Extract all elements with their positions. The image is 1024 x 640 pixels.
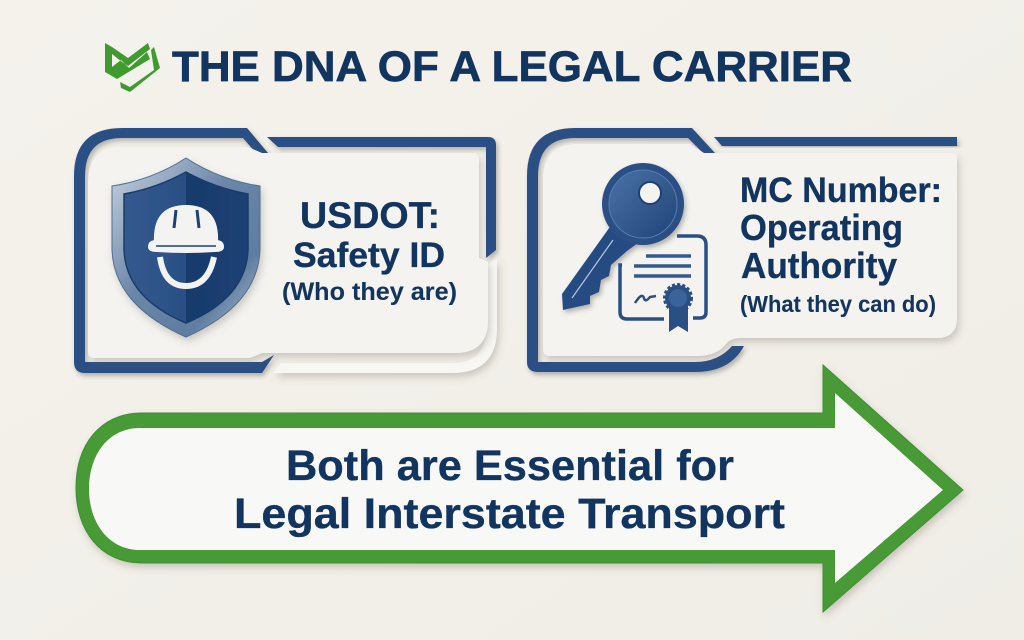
title: THE DNA OF A LEGAL CARRIER [172,43,852,91]
text: Who they are: (Who they are) [282,278,457,306]
white outer frame [273,258,497,373]
card [543,144,957,356]
navy frame left [527,128,744,372]
navy bar top [714,137,957,146]
text: line one: Both are Essential for [286,442,734,490]
seal [669,306,688,332]
icon: green logo [105,43,160,92]
panel: MC Number [527,128,957,372]
icon: certificate [620,236,706,332]
text: What they can do: (What they can do) [740,291,936,317]
card [88,147,488,358]
text: Authority: Authority [741,245,897,286]
text: MC Number heading: MC Number: [740,171,942,210]
text: line two: Legal Interstate Transport [234,490,785,538]
panel: USDOT [74,128,497,373]
text: USDOT heading: USDOT: [300,195,440,236]
icon: shield with helmet [112,158,260,337]
text: Safety ID: Safety ID [293,236,445,275]
helmet [148,205,224,286]
text: Operating: Operating [740,207,903,248]
navy frame left [74,128,274,373]
navy frame right [267,137,496,258]
arrow: both essential [76,365,963,612]
icon: key [562,163,684,310]
